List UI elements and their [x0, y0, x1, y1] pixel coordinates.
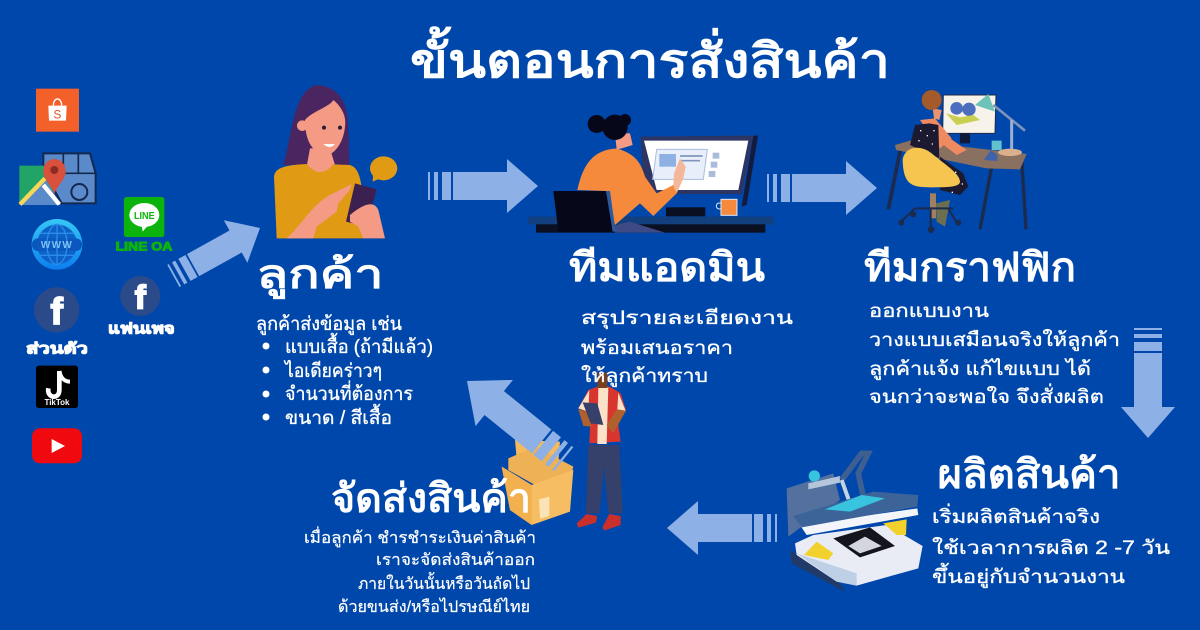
heading: production: ผลิตสินค้า [938, 453, 1120, 497]
text: shipping details: ภายในวันนั้นหรือวันถัดไป [358, 572, 530, 593]
arrow: production to shipping [667, 501, 777, 555]
text: production details: ใช้เวลาการผลิต 2 -7 วัน [932, 537, 1170, 559]
icon: Google Maps and business [19, 153, 96, 205]
arrow: customer to admin [428, 159, 538, 213]
label: LINE OA: LINE OA [116, 240, 173, 254]
text: customer details: แบบเสื้อ (ถ้ามีแล้ว) [285, 333, 433, 358]
icon: heat press machine [787, 453, 923, 592]
text: graphics details: ลูกค้าแจ้ง แก้ไขแบบ ได้ [869, 358, 1091, 380]
text: admin details [581, 307, 793, 387]
icon: Facebook page: f [135, 280, 147, 317]
heading: shipping: จัดส่งสินค้า [331, 477, 531, 521]
arrow: shipping back to customer [448, 358, 582, 482]
icon: Facebook page [120, 276, 160, 317]
arrow: graphics to production [1121, 328, 1175, 438]
icon: TikTok [36, 366, 78, 408]
icon: website globe: WWW [41, 240, 73, 251]
icon: admin at computer [528, 114, 773, 233]
icon: YouTube [32, 428, 82, 463]
label: fan page: แฟนเพจ [108, 321, 175, 337]
icon: website globe [32, 219, 82, 270]
heading: customer: ลูกค้า [256, 253, 384, 299]
heading: graphics team: ทีมกราฟฟิก [864, 246, 1076, 290]
label: personal: ส่วนตัว [26, 340, 88, 357]
icon: Facebook personal [34, 287, 79, 333]
text: customer details: จำนวนที่ต้องการ [285, 380, 413, 405]
text: admin details: พร้อมเสนอราคา [581, 338, 733, 359]
icon: Facebook personal: f [50, 290, 63, 332]
text: production details [932, 503, 1170, 588]
icon: man with clipboard illustration [577, 373, 626, 531]
panel: social channels [19, 89, 175, 463]
icon: LINE OA: LINE [134, 211, 155, 222]
icon: customer with phone [274, 85, 397, 238]
text: admin details: ให้ลูกค้าทราบ [581, 365, 708, 387]
icon: LINE OA [124, 197, 164, 237]
text: customer details: ไอเดียคร่าวๆ [283, 360, 382, 382]
icon: Shopee: S [53, 108, 61, 122]
text: customer details [256, 314, 433, 429]
text: graphics details: ออกแบบงาน [869, 301, 989, 322]
text: graphics details: วางแบบเสมือนจริงให้ลูกค้า [869, 329, 1120, 351]
arrow: admin to graphics [767, 161, 877, 215]
text: customer details: ขนาด / สีเสื้อ [285, 404, 392, 429]
icon: graphic designer at desk [888, 90, 1027, 233]
text: shipping details: เมื่อลูกค้า ชำรชำระเงินค่าสินค้า [304, 526, 536, 548]
arrow: social channels to customer [162, 207, 272, 297]
icon: TikTok: TikTok [44, 398, 70, 407]
text: admin details: สรุปรายละเอียดงาน [581, 307, 793, 330]
text: shipping details [304, 526, 536, 616]
text: production details: เริ่มผลิตสินค้าจริง [932, 503, 1100, 528]
text: customer details: ลูกค้าส่งข้อมูล เช่น [256, 314, 402, 335]
icon: box shipping illustration [502, 440, 573, 525]
icon: Shopee [36, 89, 79, 132]
text: graphics details [869, 301, 1120, 408]
title: ขั้นตอนการสั่งสินค้า [410, 26, 890, 87]
heading: admin team: ทีมแอดมิน [569, 246, 765, 290]
text: shipping details: ด้วยขนส่ง/หรือไปรษณีย์ไทย [338, 597, 530, 616]
text: graphics details: จนกว่าจะพอใจ จึงสั่งผลิต [869, 383, 1104, 408]
text: production details: ขึ้นอยู่กับจำนวนงาน [932, 563, 1125, 588]
text: shipping details: เราจะจัดส่งสินค้าออก [376, 551, 535, 569]
